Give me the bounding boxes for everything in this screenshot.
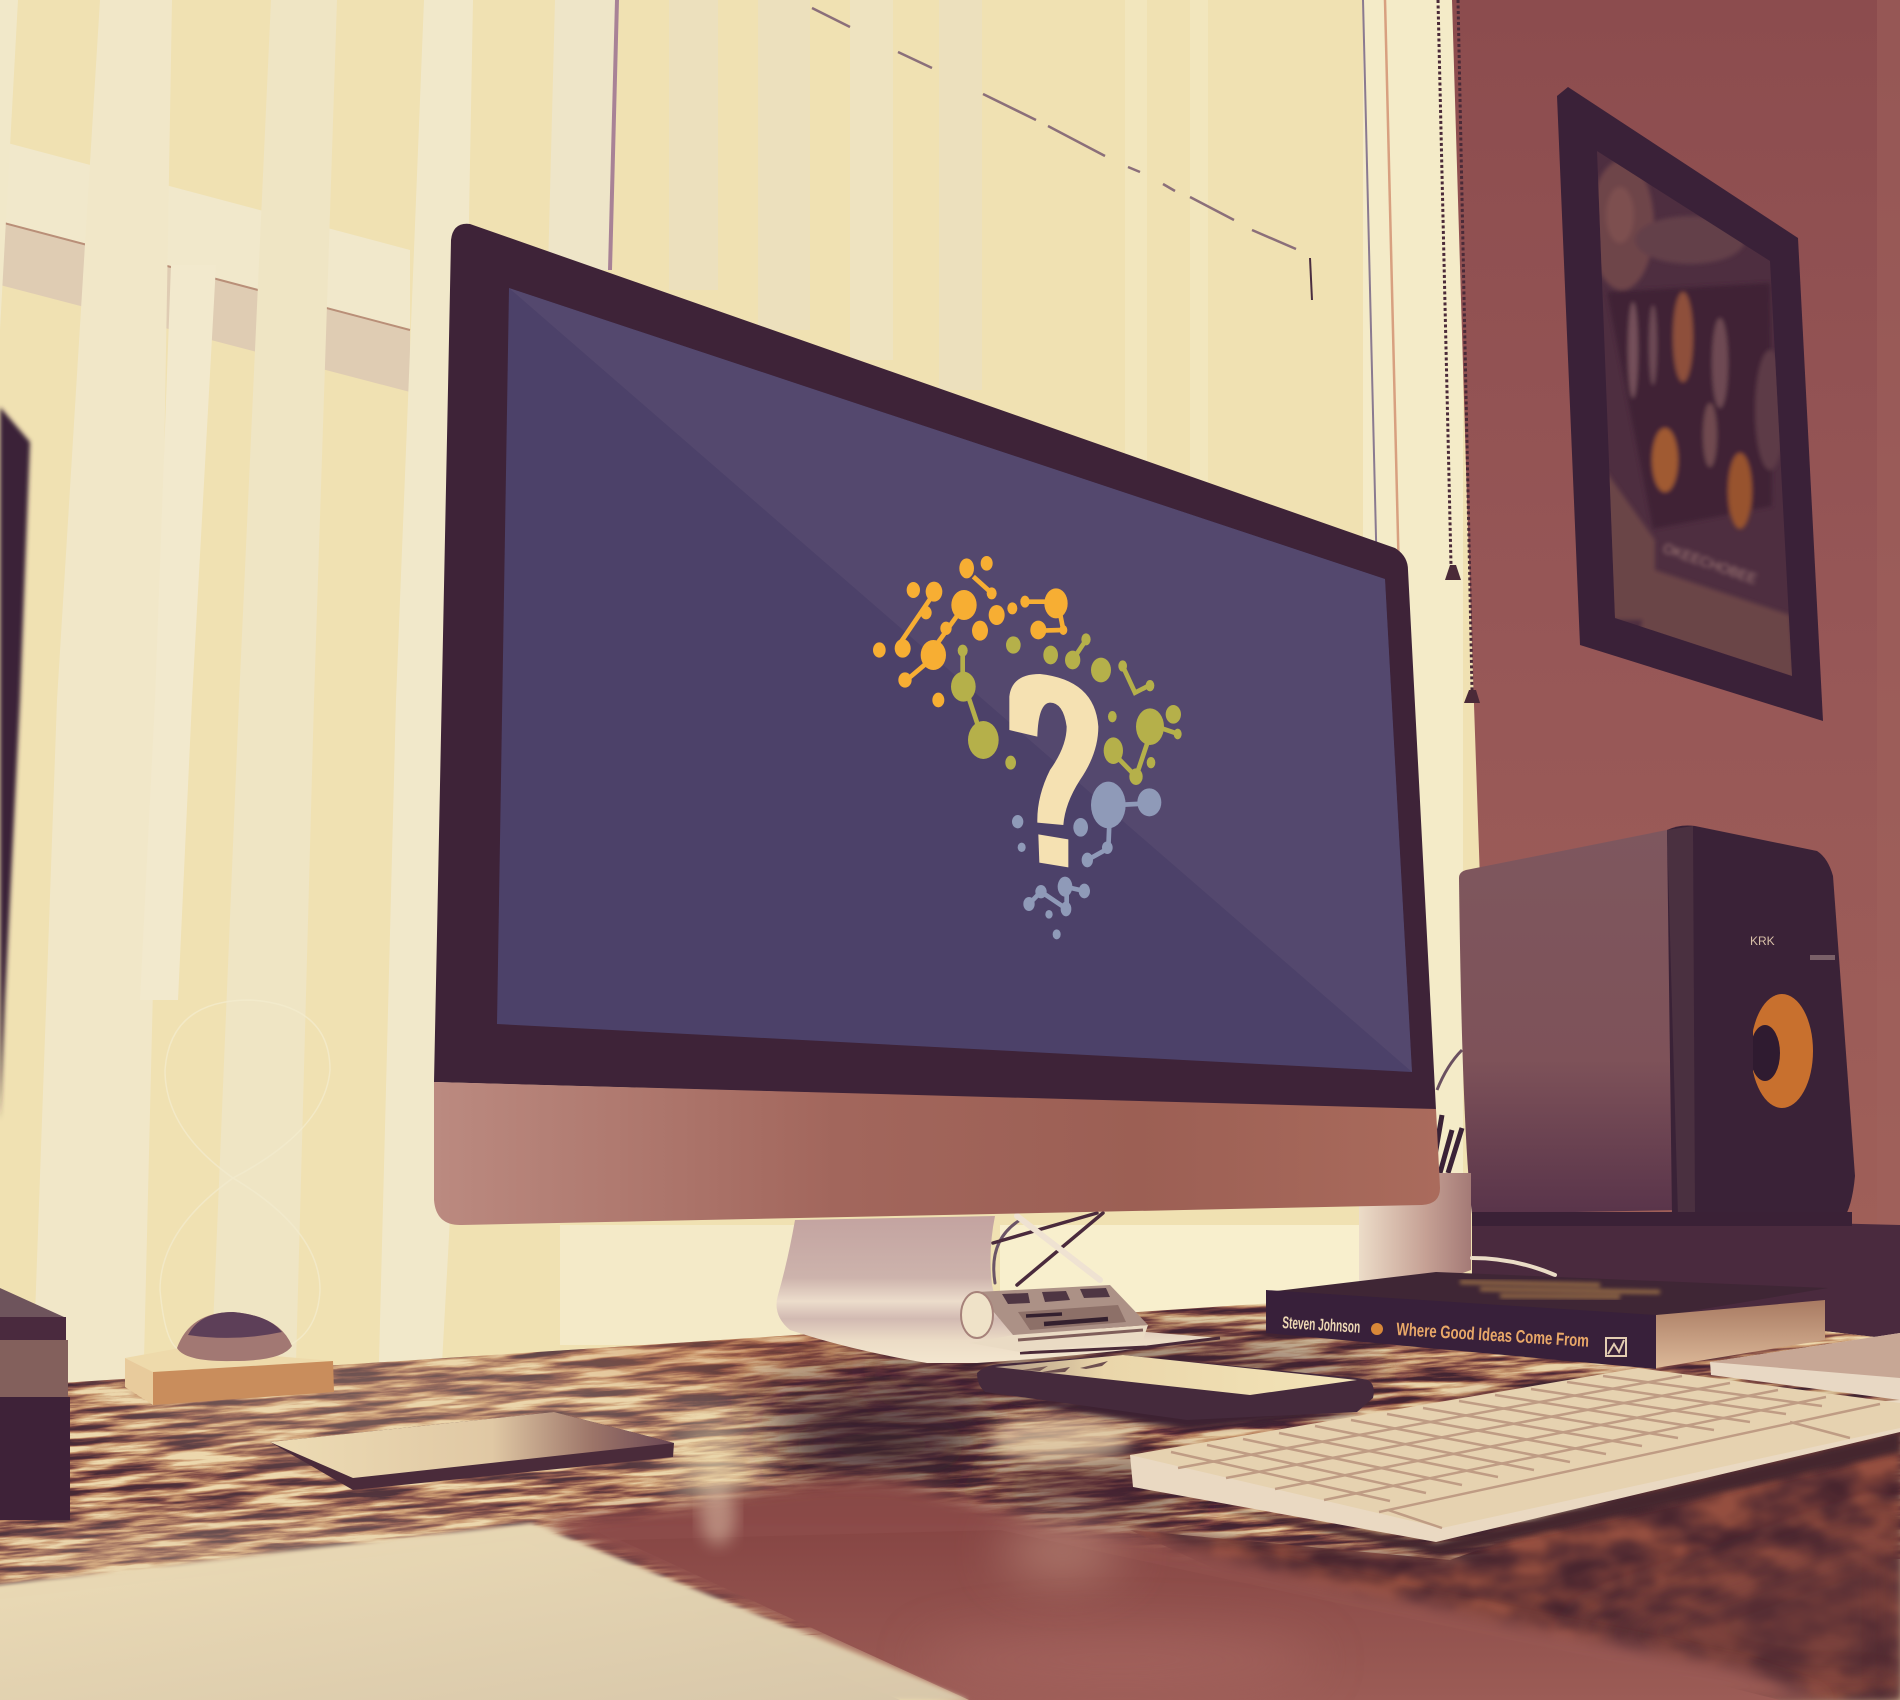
keyboard (1130, 1368, 1900, 1556)
blind pull chains (1438, 0, 1480, 703)
monitor stand (776, 1216, 1220, 1363)
smartphone (977, 1355, 1374, 1430)
screen logo: question mark network (873, 556, 1182, 939)
wooden block with urchin (125, 1312, 334, 1405)
shelf under speaker (1472, 1212, 1900, 1340)
green network (951, 633, 1182, 785)
framed poster: OKEECHOBEE (1661, 540, 1759, 587)
mug with pens (1359, 1050, 1471, 1286)
orange network (873, 556, 1068, 707)
stand foot cable line (1020, 1338, 1220, 1353)
hourglass (160, 1000, 330, 1350)
book spine text: Steven Johnson (1282, 1313, 1361, 1337)
blurred wood foreground right (1130, 1400, 1900, 1700)
speaker (1459, 826, 1855, 1219)
monitor screen (497, 288, 1412, 1072)
monitor body (434, 224, 1440, 1225)
book spine text (1282, 1313, 1626, 1356)
question mark (1009, 674, 1098, 867)
book spine text: Where Good Ideas Come From (1396, 1319, 1590, 1351)
desk surface (0, 1304, 1900, 1700)
speaker: KRK (1750, 934, 1775, 948)
white paper foreground (0, 1523, 969, 1700)
USB hub and card reader (961, 1285, 1148, 1352)
framed poster (1557, 87, 1823, 721)
monitor chin (434, 1082, 1440, 1225)
trackpad (1710, 1333, 1900, 1400)
blue network (1012, 782, 1161, 939)
left monitor edge (0, 407, 30, 1120)
window with vertical blinds (0, 0, 1500, 1420)
coaster pad on desk (270, 1412, 674, 1490)
left stacked boxes (0, 1288, 70, 1520)
cables (993, 1213, 1555, 1285)
brown folder foreground (536, 1478, 1828, 1700)
monitor bezel (434, 224, 1436, 1110)
closed book (1266, 1272, 1828, 1369)
wall (1452, 0, 1900, 1300)
